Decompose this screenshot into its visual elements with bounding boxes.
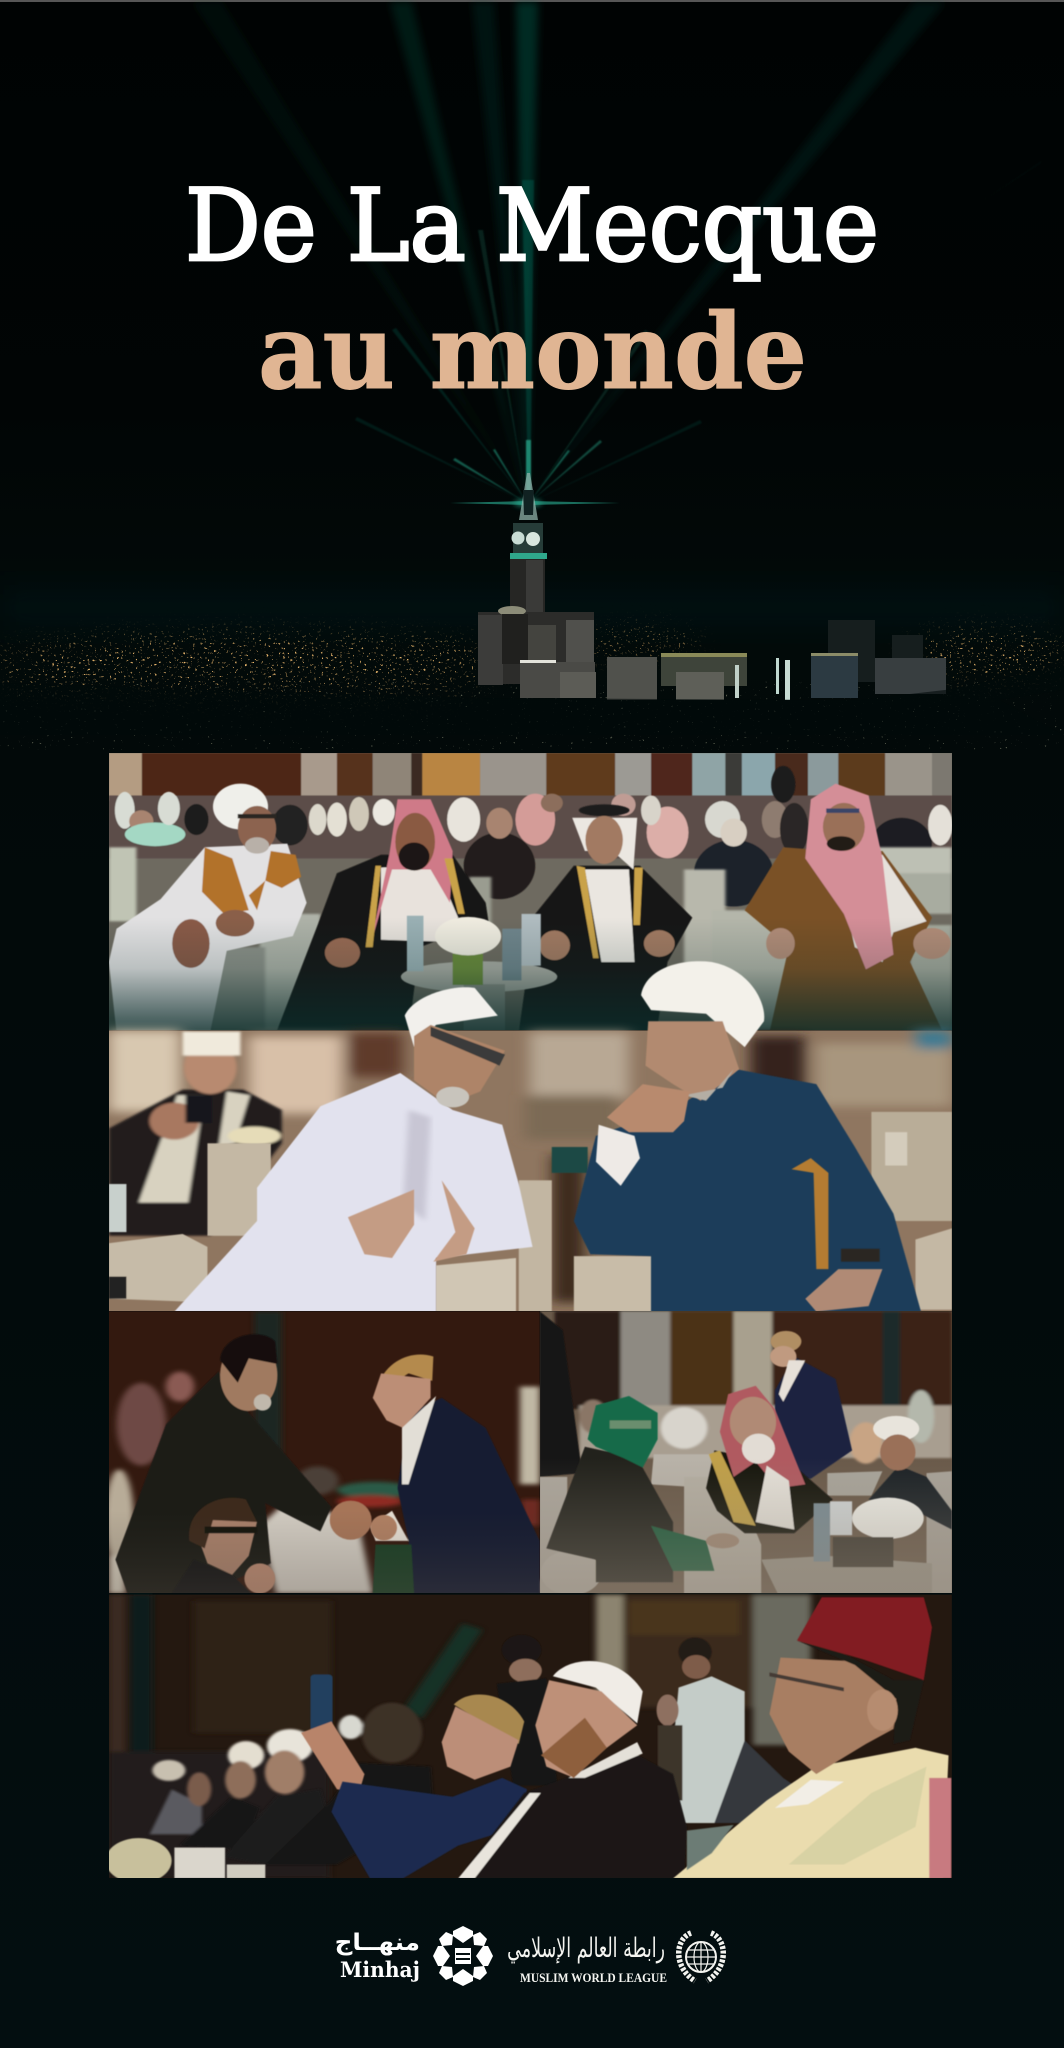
background: city lights xyxy=(0,600,1064,740)
background: thin laser beams near the tower xyxy=(355,180,702,503)
chairs xyxy=(109,847,952,1030)
photo: seated guests, smiling elder xyxy=(540,1311,953,1595)
logo: Minhaj wordmark: منهــاج xyxy=(335,1929,420,1956)
guest in black cloak and pink headdress xyxy=(276,799,488,1032)
title xyxy=(185,169,879,413)
man in navy jacket xyxy=(370,1355,540,1594)
bottom fade xyxy=(109,1525,540,1593)
icon: tower shaft xyxy=(510,559,545,615)
icon: clock head xyxy=(510,523,547,559)
smiling elder in pink headdress xyxy=(706,1386,833,1533)
illustration: dark hills xyxy=(0,665,1064,735)
blurred hall background xyxy=(555,1311,952,1464)
photo: handshake between two guests xyxy=(105,1311,540,1594)
illustration: Makkah clock tower and skyline xyxy=(0,473,1064,735)
blurred background xyxy=(105,1311,540,1594)
logo: Muslim World League wordmark: رابطة العالم الإسلامي xyxy=(507,1933,665,1964)
icon: hotel towers xyxy=(478,606,596,698)
guest in brown cloak and pink headdress xyxy=(745,784,951,1032)
flowers and cup xyxy=(106,1825,734,1883)
standing man in black at edge xyxy=(540,1311,582,1477)
seated man with glasses xyxy=(188,1498,276,1593)
standing man in navy suit xyxy=(770,1331,852,1479)
man with green turban xyxy=(546,1396,739,1582)
logo: Minhaj wordmark xyxy=(335,1929,420,1983)
background: sparse lights on the dark foreground xyxy=(0,680,1064,750)
scholar in blue coat xyxy=(574,961,921,1312)
blurred hall background xyxy=(109,1030,952,1312)
sofas xyxy=(540,1454,952,1595)
logo: Minhaj emblem xyxy=(433,1926,493,1986)
photo: audience with man in red fez xyxy=(106,1595,952,1883)
man in red fez and yellow robe xyxy=(673,1597,951,1878)
teal fade at photo bottom xyxy=(109,928,952,1030)
sofas xyxy=(109,1112,952,1312)
man in black suit xyxy=(115,1334,331,1594)
man in navy jacket with tan cap xyxy=(331,1694,527,1878)
background: laser origin flare xyxy=(450,500,620,506)
title: line two: au monde xyxy=(258,290,807,413)
blurred man with phone xyxy=(109,1032,282,1236)
scholar in white robe xyxy=(174,987,533,1312)
small round table with flowers xyxy=(401,914,557,1032)
row of small seated guests xyxy=(150,1703,433,1864)
table with flowers and bottles xyxy=(761,1498,932,1594)
bottom fade xyxy=(540,1476,952,1593)
logo: Muslim World League globe emblem xyxy=(679,1933,723,1981)
photo: two scholars in conversation xyxy=(109,961,952,1312)
guest in white robe xyxy=(109,784,307,1032)
photo: conference audience, front row xyxy=(100,740,964,1036)
crowd xyxy=(109,766,952,906)
icon: spire xyxy=(519,473,538,520)
blurred hall background xyxy=(109,1595,811,1878)
hall wall panels xyxy=(109,753,952,801)
background: faint horizon glow xyxy=(0,585,1064,630)
logo: Muslim World League wordmark xyxy=(507,1933,667,1985)
bearded man with white cap xyxy=(458,1661,687,1878)
logo: Muslim World League wordmark: MUSLIM WORLD LEAGUE xyxy=(520,1970,667,1985)
hand holding phone xyxy=(301,1674,364,1793)
man with white turban xyxy=(869,1416,952,1530)
guest in black cloak and white headdress xyxy=(519,804,692,1032)
background: soft wide laser beams xyxy=(192,2,1064,500)
man behind in dark xyxy=(497,1635,557,1785)
logo: Minhaj wordmark: Minhaj xyxy=(340,1958,420,1983)
handshake xyxy=(330,1501,397,1540)
standing man in white xyxy=(657,1638,794,1823)
icon: right-hand buildings xyxy=(607,620,946,700)
logos xyxy=(335,1926,723,1986)
background: top edge line xyxy=(0,0,1064,2)
title: line one: De La Mecque xyxy=(185,169,879,284)
